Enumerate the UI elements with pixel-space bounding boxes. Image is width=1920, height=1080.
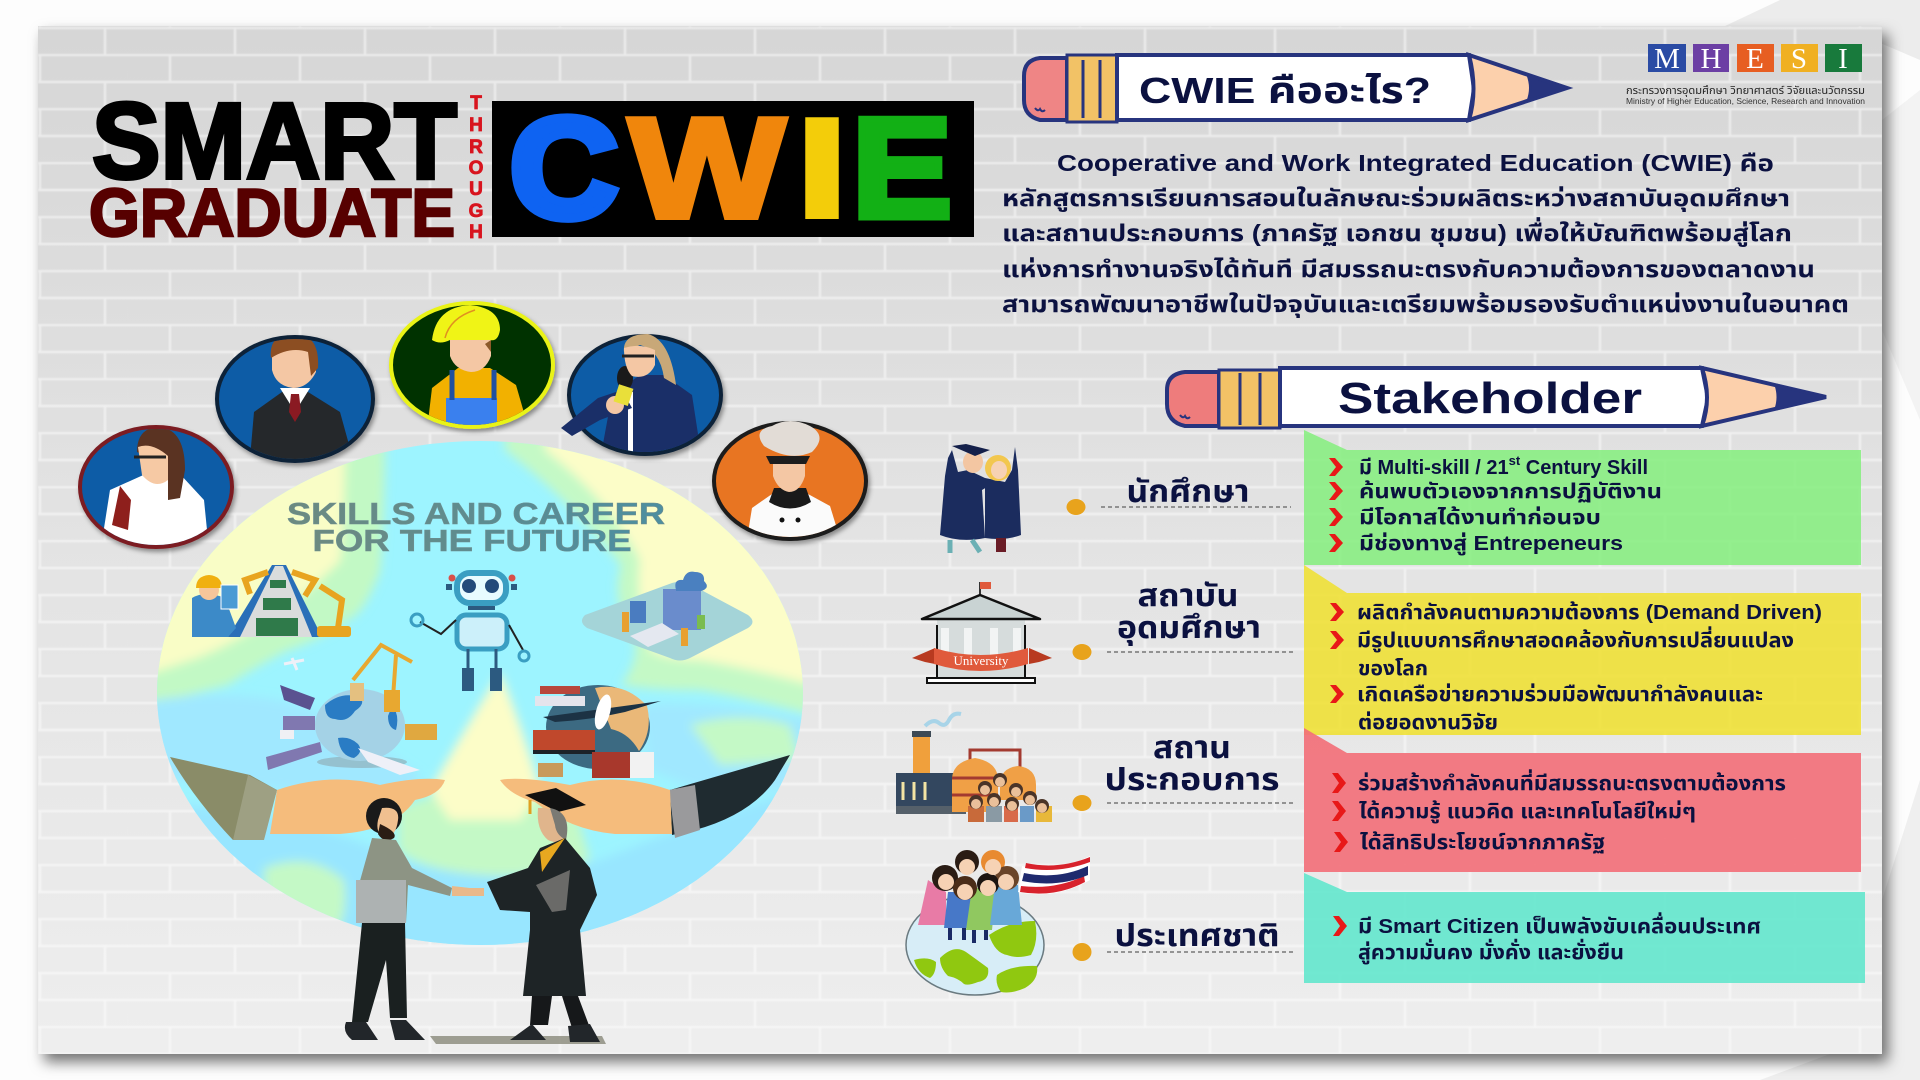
CWIE black banner: E [852,89,952,248]
icon: isometric data city [582,572,752,660]
title: Smart Graduate through CWIE [89,80,974,251]
connector dot and line [1066,499,1291,515]
CWIE black banner: I [795,89,849,248]
stakeholder row: students [940,430,1861,565]
paragraph: CWIE definition: แห่งการทำงานจริงได้ทันที มีสมรรถนะตรงกับความต้องการของตลาดงาน [1002,256,1815,282]
label: ประกอบการ [1104,762,1280,797]
icon: right transport globe [533,685,661,778]
bullet: มีรูปแบบการศึกษาสอดคล้องกับการเปลี่ยนแปลง [1357,626,1794,652]
bullet: มี Smart Citizen เป็นพลังขับเคลื่อนประเทศ [1358,912,1761,938]
bullet [1329,453,1648,479]
globe heading: SKILLS AND CAREER [287,496,665,531]
left hand and sleeve [170,757,445,840]
title word SMART: SMART [92,80,457,201]
stakeholder row: workplaces [896,714,1861,872]
note panel: yellow [1304,565,1861,735]
globe base [157,441,803,945]
connector dot and line [1072,644,1296,660]
bullet: ร่วมสร้างกำลังคนที่มีสมรรถนะตรงตามต้องการ [1358,769,1786,795]
bullet: ได้ความรู้ แนวคิด และเทคโนโลยีใหม่ๆ [1359,801,1696,823]
label: นักศึกษา [1126,474,1250,509]
person circle: teacher [80,427,232,560]
ministry names: กระทรวงการอุดมศึกษา วิทยาศาสตร์ วิจัยและนวัตกรรม [1626,85,1865,97]
logo letter tiles: S [1791,43,1807,75]
Thai flag [1018,856,1090,894]
corner decoration [1725,0,1920,1080]
connector dot and line [1072,795,1296,811]
logo letter tiles: I [1838,43,1848,75]
pencil heading: CWIE คืออะไร? [1024,55,1567,122]
globe heading: FOR THE FUTURE [312,523,632,558]
stakeholder row: nation [906,850,1865,995]
bullet: มี Multi-skill / 21 [1359,457,1509,479]
title word GRADUATE: GRADUATE [89,175,455,251]
vertical word THROUGH: U [469,179,483,200]
vertical word THROUGH: H [469,222,483,243]
vertical word THROUGH: O [469,158,483,179]
person: graduate shaking hands [430,788,606,1044]
logo letter tiles: E [1746,43,1764,75]
right hand and sleeve [500,755,790,838]
big globe illustration [157,441,803,1044]
bullet continuation: ของโลก [1358,658,1428,680]
label: ประเทศชาติ [1114,918,1280,953]
bullet: st [1509,453,1521,468]
icon: factory and people [896,714,1052,822]
bullet continuation: ต่อยอดงานวิจัย [1358,712,1498,734]
CWIE black banner: W [629,89,785,248]
person: young man shaking hands [345,798,484,1040]
bullet continuation: สู่ความมั่นคง มั่งคั่ง และยั่งยืน [1358,939,1624,964]
paragraph: CWIE definition: Cooperative and Work Integrated Education (CWIE) คือ [1057,150,1774,176]
vertical word THROUGH: H [469,115,483,136]
paragraph: CWIE definition: สามารถพัฒนาอาชีพในปัจจุบันและเตรียมพร้อมรองรับตำแหน่งงานในอนาคต [1002,291,1849,318]
logo letter tiles: H [1701,43,1722,75]
paragraph: CWIE definition: และสถานประกอบการ (ภาครัฐ เอกชน ชุมชน) เพื่อให้บัณฑิตพร้อมสู่โลก [1002,217,1792,247]
bullet: ผลิตกำลังคนตามความต้องการ (Demand Driven) [1357,602,1822,624]
reporter arm and microphone [561,366,633,436]
bullet: ค้นพบตัวเองจากการปฏิบัติงาน [1359,481,1662,503]
label: อุดมศึกษา [1117,610,1261,646]
bullet: มีช่องทางสู่ Entrepeneurs [1359,533,1623,555]
label: สถาบัน [1138,578,1238,613]
bullet: เกิดเครือข่ายความร่วมมือพัฒนากำลังคนและ [1357,684,1763,706]
note panel: red [1304,728,1861,872]
pencil heading: CWIE คืออะไร?: CWIE คืออะไร? [1139,70,1431,111]
icon: university: University [954,653,1009,668]
pencil heading: Stakeholder: Stakeholder [1338,374,1642,423]
vertical word THROUGH: T [470,93,482,114]
MHESI logo: Ministry of Higher Education, Science, Research and Innovation [1626,96,1865,106]
icon: children on globe with Thai flag [906,850,1090,995]
note panel: teal [1304,873,1865,983]
connector dot and line [1072,943,1296,961]
logo letter tiles: M [1654,43,1680,75]
stakeholder row: higher education institutions [912,565,1861,735]
person circle: reporter [561,334,721,460]
label: สถาน [1153,730,1231,765]
icon: robot factory line [192,565,351,637]
icon: left logistics globe [266,645,437,775]
vertical word THROUGH: R [469,137,483,158]
person circle: chef [714,421,866,545]
CWIE black banner [492,89,974,248]
icon: graduates [940,444,1021,553]
paragraph: CWIE definition: หลักสูตรการเรียนการสอนในลักษณะร่วมผลิตระหว่างสถาบันอุดมศึกษา [1002,185,1790,212]
person circle: engineer [391,303,553,430]
person circle: businessman [217,333,373,470]
paragraph: CWIE definition [1002,150,1849,318]
bullet: มีโอกาสได้งานทำก่อนจบ [1359,507,1601,529]
bullet: ได้สิทธิประโยชน์จากภาครัฐ [1360,832,1605,854]
logo letter tiles [1648,43,1862,75]
MHESI logo [1626,43,1865,106]
note panel: green [1304,430,1861,565]
bullet: Century Skill [1520,457,1648,479]
pencil heading: Stakeholder [1167,368,1826,428]
globe heading [287,496,665,558]
icon: university [912,582,1052,683]
CWIE black banner: C [510,89,618,248]
vertical word THROUGH: G [469,201,483,222]
vertical word THROUGH [469,93,483,243]
icon: robot [411,573,529,691]
